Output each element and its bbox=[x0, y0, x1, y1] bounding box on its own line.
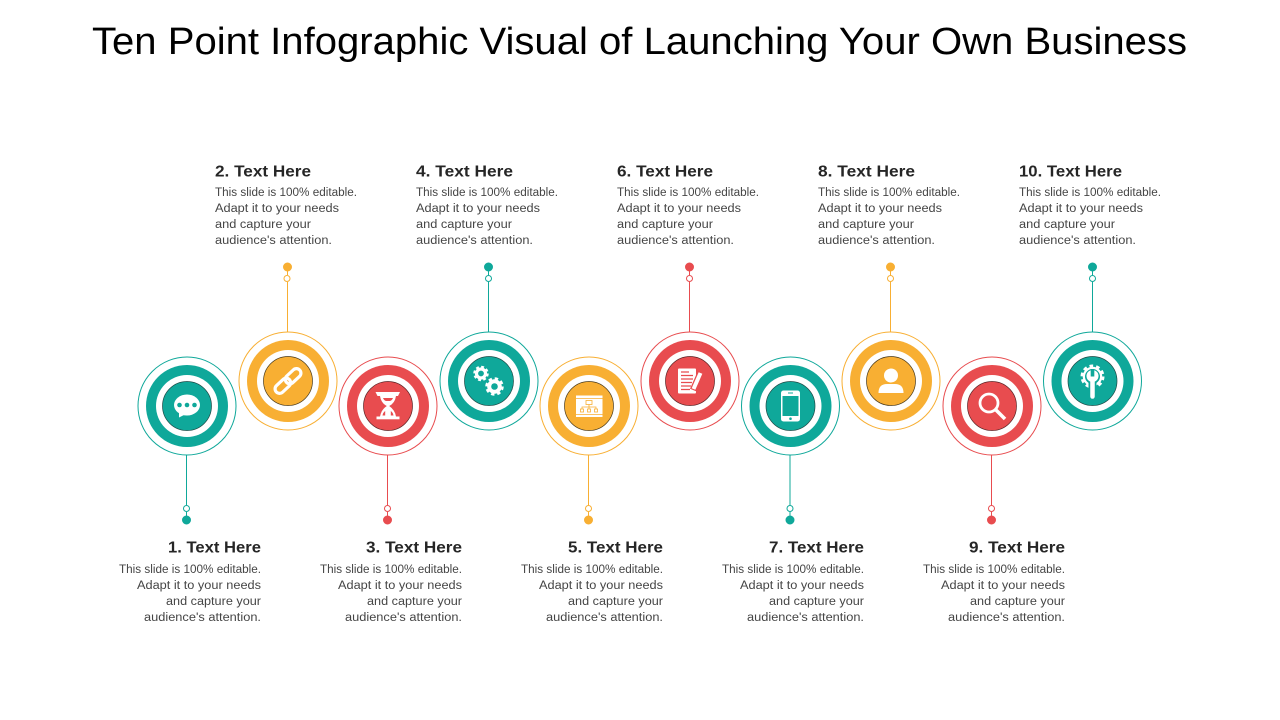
text block 7: 7. Text Here bbox=[769, 540, 864, 556]
icon: gears bbox=[474, 367, 502, 394]
text block 4: This slide is 100% editable. bbox=[416, 187, 558, 199]
title: Ten Point Infographic Visual of Launching Your Own Business bbox=[92, 21, 1187, 63]
node 8: orange, person icon bbox=[842, 263, 940, 430]
text block 10: 10. Text Here bbox=[1019, 164, 1122, 180]
text block 5 bbox=[521, 540, 663, 624]
medallion 9 bbox=[943, 357, 1041, 455]
medallion 3 bbox=[339, 357, 437, 455]
text block 3: and capture your bbox=[367, 596, 462, 608]
connector 9 bbox=[988, 455, 996, 524]
node 10: teal, gear and wrench icon bbox=[1044, 263, 1142, 430]
icon: chain link bbox=[273, 367, 303, 395]
connector 10 bbox=[1088, 263, 1096, 332]
text block 1 bbox=[119, 540, 261, 624]
medallion 1 bbox=[138, 357, 236, 455]
connector 2 bbox=[284, 263, 292, 332]
text block 5: and capture your bbox=[568, 596, 663, 608]
medallion 10 bbox=[1044, 332, 1142, 430]
text block 1: audience's attention. bbox=[144, 612, 261, 624]
text block 2: Adapt it to your needs bbox=[215, 203, 339, 215]
text block 3: audience's attention. bbox=[345, 612, 462, 624]
text block 6: Adapt it to your needs bbox=[617, 203, 741, 215]
connector 6 bbox=[686, 263, 694, 332]
text block 7: audience's attention. bbox=[747, 612, 864, 624]
connector 1 bbox=[182, 455, 190, 524]
text block 3: This slide is 100% editable. bbox=[320, 564, 462, 576]
text block 4: and capture your bbox=[416, 219, 512, 231]
text block 8: audience's attention. bbox=[818, 235, 935, 247]
text block 4 bbox=[416, 164, 558, 247]
node 7: teal, phone icon bbox=[742, 357, 840, 524]
text block 8 bbox=[818, 164, 960, 247]
icon: org chart screen bbox=[576, 396, 602, 417]
text block 2: This slide is 100% editable. bbox=[215, 187, 357, 199]
icon: hourglass bbox=[376, 392, 400, 419]
connector 4 bbox=[484, 263, 492, 332]
text block 1: This slide is 100% editable. bbox=[119, 564, 261, 576]
medallion 8 bbox=[842, 332, 940, 430]
text block 5: audience's attention. bbox=[546, 612, 663, 624]
connector 5 bbox=[584, 455, 592, 524]
text block 7: Adapt it to your needs bbox=[740, 580, 864, 592]
text block 9: audience's attention. bbox=[948, 612, 1065, 624]
medallion 4 bbox=[440, 332, 538, 430]
node 4: teal, gears icon bbox=[440, 263, 538, 430]
text block 1: and capture your bbox=[166, 596, 261, 608]
text block 2: 2. Text Here bbox=[215, 164, 311, 180]
text block 6: audience's attention. bbox=[617, 235, 734, 247]
icon: person bbox=[878, 368, 904, 393]
text block 8: Adapt it to your needs bbox=[818, 203, 942, 215]
medallion 6 bbox=[641, 332, 739, 430]
text block 7 bbox=[722, 540, 864, 624]
text block 4: 4. Text Here bbox=[416, 164, 513, 180]
node 5: orange, org chart screen icon bbox=[540, 357, 638, 524]
text block 5: This slide is 100% editable. bbox=[521, 564, 663, 576]
text block 10: This slide is 100% editable. bbox=[1019, 187, 1161, 199]
text block 10: audience's attention. bbox=[1019, 235, 1136, 247]
text block 9: Adapt it to your needs bbox=[941, 580, 1065, 592]
node 1: teal, chat icon bbox=[138, 357, 236, 524]
text block 9: and capture your bbox=[970, 596, 1065, 608]
text block 9: 9. Text Here bbox=[969, 540, 1065, 556]
text block 9 bbox=[923, 540, 1065, 624]
text block 5: 5. Text Here bbox=[568, 540, 663, 556]
text block 2: audience's attention. bbox=[215, 235, 332, 247]
node 2: orange, link icon bbox=[239, 263, 337, 430]
text block 3 bbox=[320, 540, 462, 624]
icon: document and pencil bbox=[678, 368, 700, 394]
node 9: red, magnifier icon bbox=[943, 357, 1041, 524]
medallion 5 bbox=[540, 357, 638, 455]
text block 8: and capture your bbox=[818, 219, 914, 231]
icon: gear and wrench bbox=[1082, 366, 1103, 396]
icon: smartphone bbox=[781, 390, 800, 422]
text block 1: Adapt it to your needs bbox=[137, 580, 261, 592]
text block 10 bbox=[1019, 164, 1161, 247]
text block 6: This slide is 100% editable. bbox=[617, 187, 759, 199]
text block 1: 1. Text Here bbox=[168, 540, 261, 556]
text block 7: and capture your bbox=[769, 596, 864, 608]
text block 6: and capture your bbox=[617, 219, 713, 231]
text block 6 bbox=[617, 164, 759, 247]
connector 7 bbox=[786, 455, 794, 524]
text block 7: This slide is 100% editable. bbox=[722, 564, 864, 576]
text block 2 bbox=[215, 164, 357, 247]
text block 9: This slide is 100% editable. bbox=[923, 564, 1065, 576]
text block 3: 3. Text Here bbox=[366, 540, 462, 556]
text block 10: and capture your bbox=[1019, 219, 1115, 231]
node 3: red, hourglass icon bbox=[339, 357, 437, 524]
icon: magnifier bbox=[980, 394, 1005, 419]
text block 2: and capture your bbox=[215, 219, 311, 231]
connector 8 bbox=[886, 263, 894, 332]
icon: chat bubble bbox=[174, 394, 200, 418]
text block 4: audience's attention. bbox=[416, 235, 533, 247]
text block 3: Adapt it to your needs bbox=[338, 580, 462, 592]
text block 4: Adapt it to your needs bbox=[416, 203, 540, 215]
node 6: red, document and pencil icon bbox=[641, 263, 739, 430]
text block 8: This slide is 100% editable. bbox=[818, 187, 960, 199]
text block 8: 8. Text Here bbox=[818, 164, 915, 180]
medallion 2 bbox=[239, 332, 337, 430]
medallion 7 bbox=[742, 357, 840, 455]
connector 3 bbox=[384, 455, 392, 524]
text block 10: Adapt it to your needs bbox=[1019, 203, 1143, 215]
text block 5: Adapt it to your needs bbox=[539, 580, 663, 592]
text block 6: 6. Text Here bbox=[617, 164, 713, 180]
